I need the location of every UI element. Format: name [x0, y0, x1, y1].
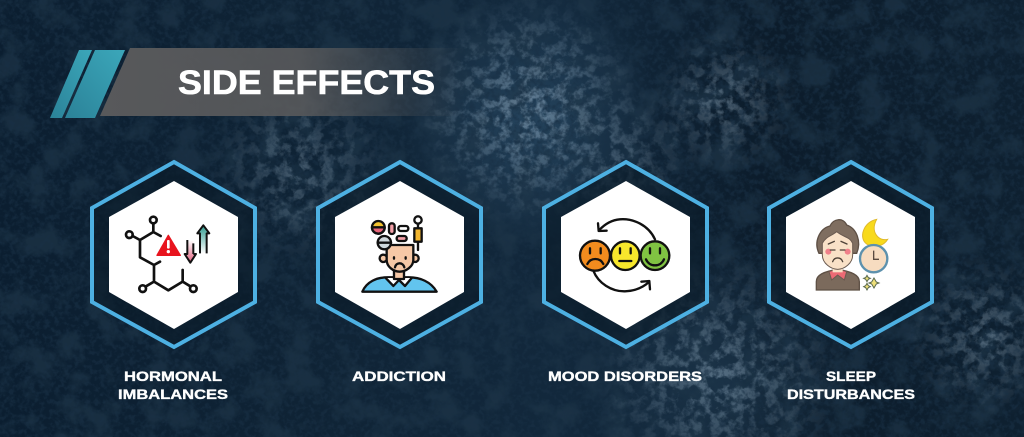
label: SLEEP — [826, 369, 876, 384]
white hexagon — [335, 181, 464, 329]
hexagon frame — [318, 162, 481, 347]
icon: three mood faces with cycle arrows — [580, 219, 669, 291]
moon — [863, 219, 888, 246]
label — [787, 369, 915, 402]
hexagon frame — [92, 162, 255, 347]
title banner — [50, 48, 465, 118]
panel: mood disorders — [544, 162, 707, 384]
panel: addiction — [318, 162, 481, 384]
banner: grey fading ribbon — [100, 48, 465, 116]
small capsules — [398, 226, 408, 231]
icon: person thinking of pills and syringe — [362, 216, 437, 292]
label: MOOD DISORDERS — [548, 369, 702, 384]
panel: sleep disturbances — [769, 162, 932, 402]
white hexagon — [109, 181, 238, 329]
label: ADDICTION — [352, 369, 446, 384]
title: SIDE EFFECTS — [178, 64, 435, 102]
white hexagon — [786, 181, 915, 329]
panel: hormonal imbalances — [92, 162, 255, 402]
capsule — [389, 223, 395, 234]
label — [118, 369, 228, 402]
label: HORMONAL — [124, 369, 222, 384]
face — [822, 232, 853, 269]
grey pill — [378, 236, 391, 249]
banner accent: wide teal stripe — [65, 50, 125, 118]
banner accent: thin teal stripe — [50, 50, 92, 118]
white hexagon — [561, 181, 690, 329]
hexagon frame — [769, 162, 932, 347]
round pill — [372, 221, 385, 234]
up arrow — [197, 225, 209, 253]
icon: molecule with warning and arrows — [126, 217, 209, 292]
down arrow — [185, 240, 196, 263]
warning triangle — [157, 235, 180, 255]
shirt — [362, 277, 437, 292]
clock — [860, 245, 887, 272]
sparkles — [869, 278, 879, 288]
neck and head — [394, 268, 404, 279]
hexagon frame — [544, 162, 707, 347]
icon: tired person with moon and clock — [816, 219, 888, 290]
label: DISTURBANCES — [787, 387, 915, 402]
syringe — [414, 216, 422, 224]
label: IMBALANCES — [118, 387, 228, 402]
sweater — [816, 269, 859, 290]
hair — [817, 220, 859, 253]
